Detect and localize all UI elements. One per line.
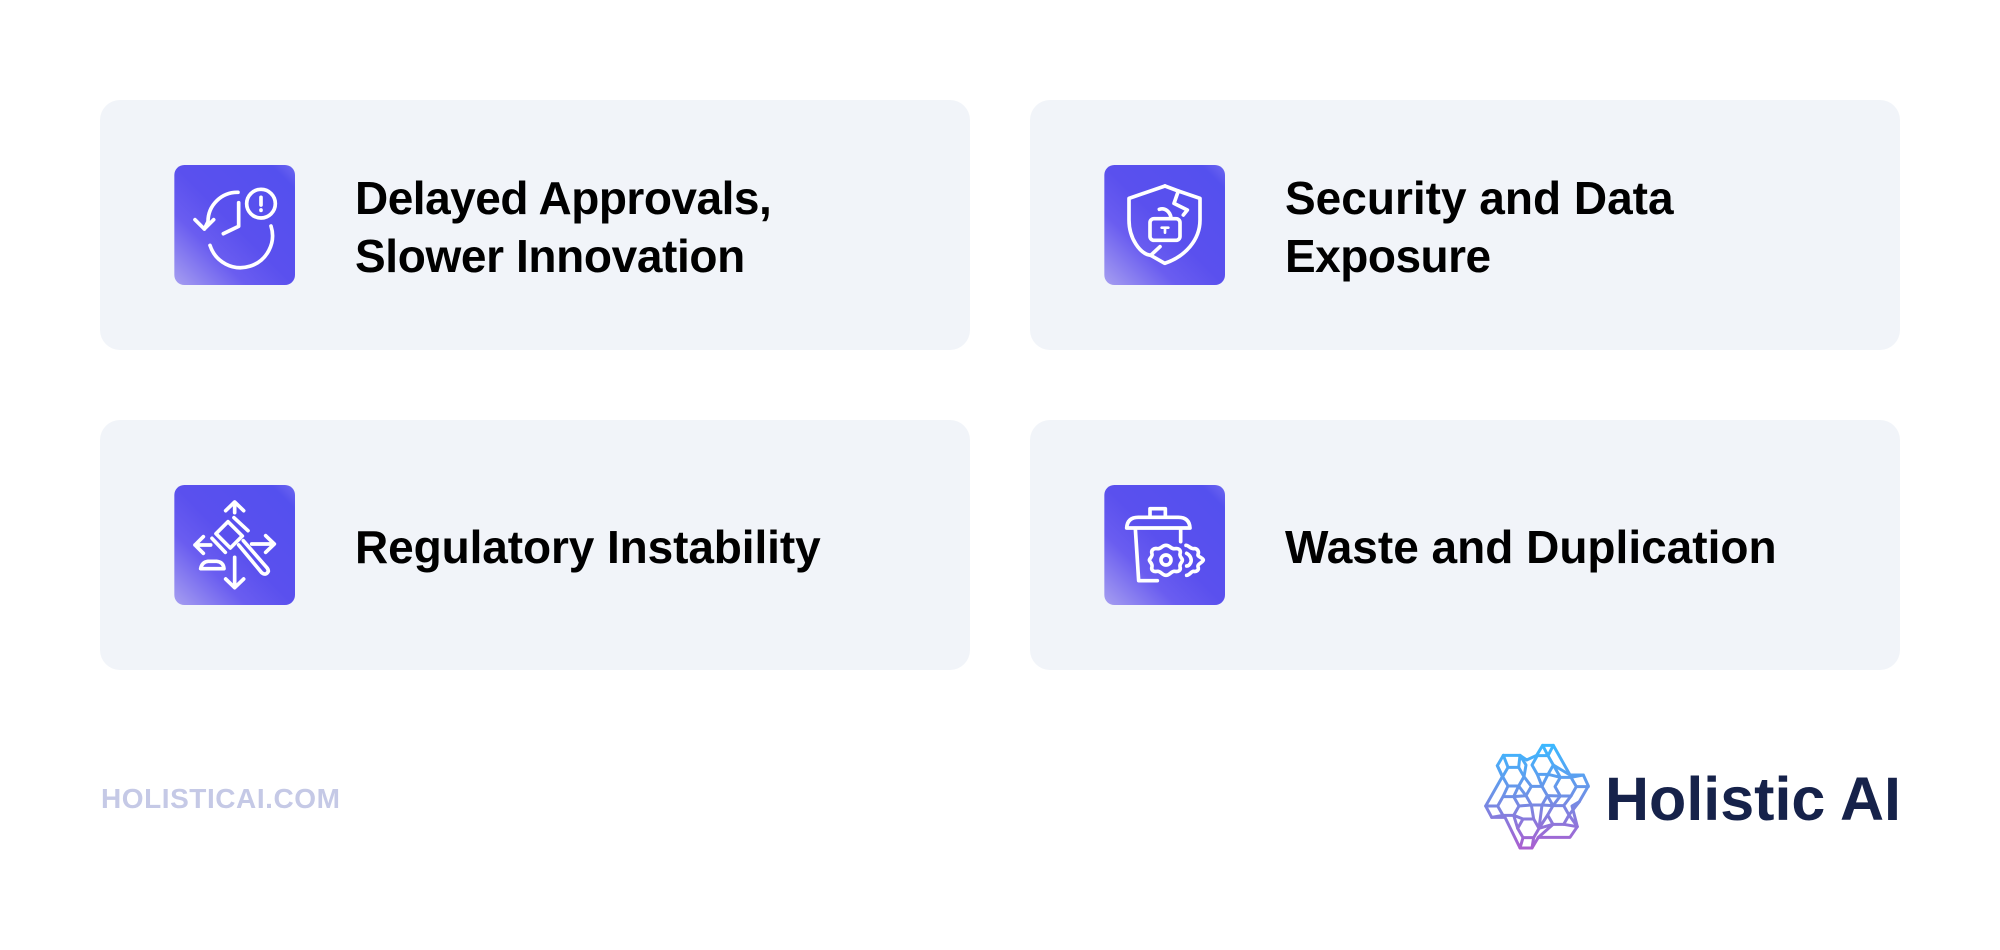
- text: security: Exposure: [1285, 230, 1491, 282]
- text: delayed approvals: Slower Innovation: [355, 230, 745, 282]
- text: waste and duplication: Waste and Duplication: [1285, 521, 1777, 573]
- panel: regulatory instability: [100, 420, 970, 670]
- text: website: HOLISTICAI.COM: [101, 783, 340, 814]
- panel: delayed approvals: [100, 100, 970, 350]
- panel: waste and duplication: [1030, 420, 1900, 670]
- icon: bin with gears: [1104, 485, 1225, 605]
- icon: cracked shield with lock: [1104, 165, 1225, 285]
- icon: gavel with arrows: [174, 485, 295, 605]
- logo: Holistic AI: [1484, 744, 1901, 850]
- text: security: Security and Data: [1285, 172, 1674, 224]
- icon: clock with alert: [174, 165, 295, 285]
- text: regulatory instability: Regulatory Instability: [355, 521, 821, 573]
- text: Holistic AI: Holistic AI: [1605, 765, 1901, 833]
- panel: security and data exposure: [1030, 100, 1900, 350]
- icon: hexagon network: [1484, 744, 1590, 850]
- text: delayed approvals: [355, 172, 771, 282]
- text: security: [1285, 172, 1674, 282]
- text: delayed approvals: Delayed Approvals,: [355, 172, 771, 224]
